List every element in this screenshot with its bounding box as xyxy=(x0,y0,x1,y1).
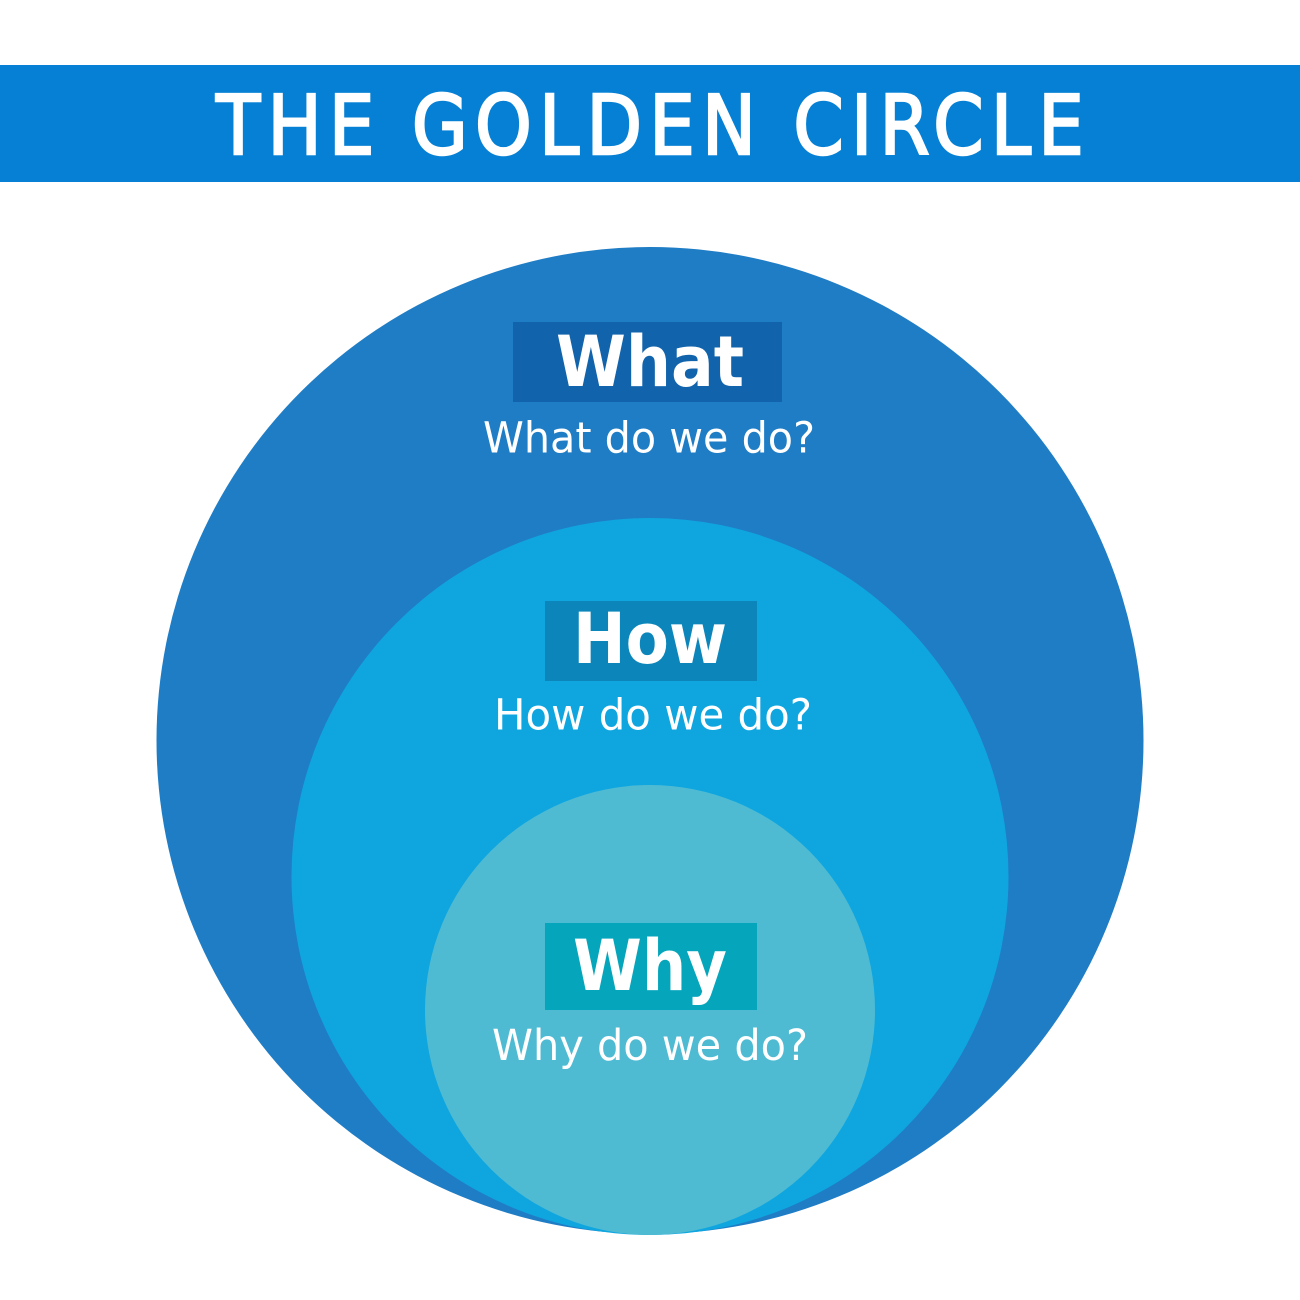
what subtitle: What do we do? xyxy=(483,414,815,464)
title banner xyxy=(0,65,1300,182)
panel: how circle xyxy=(292,518,1008,1235)
panel: why circle xyxy=(425,785,875,1235)
how subtitle: How do we do? xyxy=(494,690,812,740)
why label: Why xyxy=(573,925,727,1007)
why subtitle: Why do we do? xyxy=(492,1021,808,1071)
title: THE GOLDEN CIRCLE xyxy=(215,79,1084,174)
how label: How xyxy=(573,598,727,680)
what label: What xyxy=(556,321,744,403)
panel: what circle xyxy=(156,247,1144,1234)
